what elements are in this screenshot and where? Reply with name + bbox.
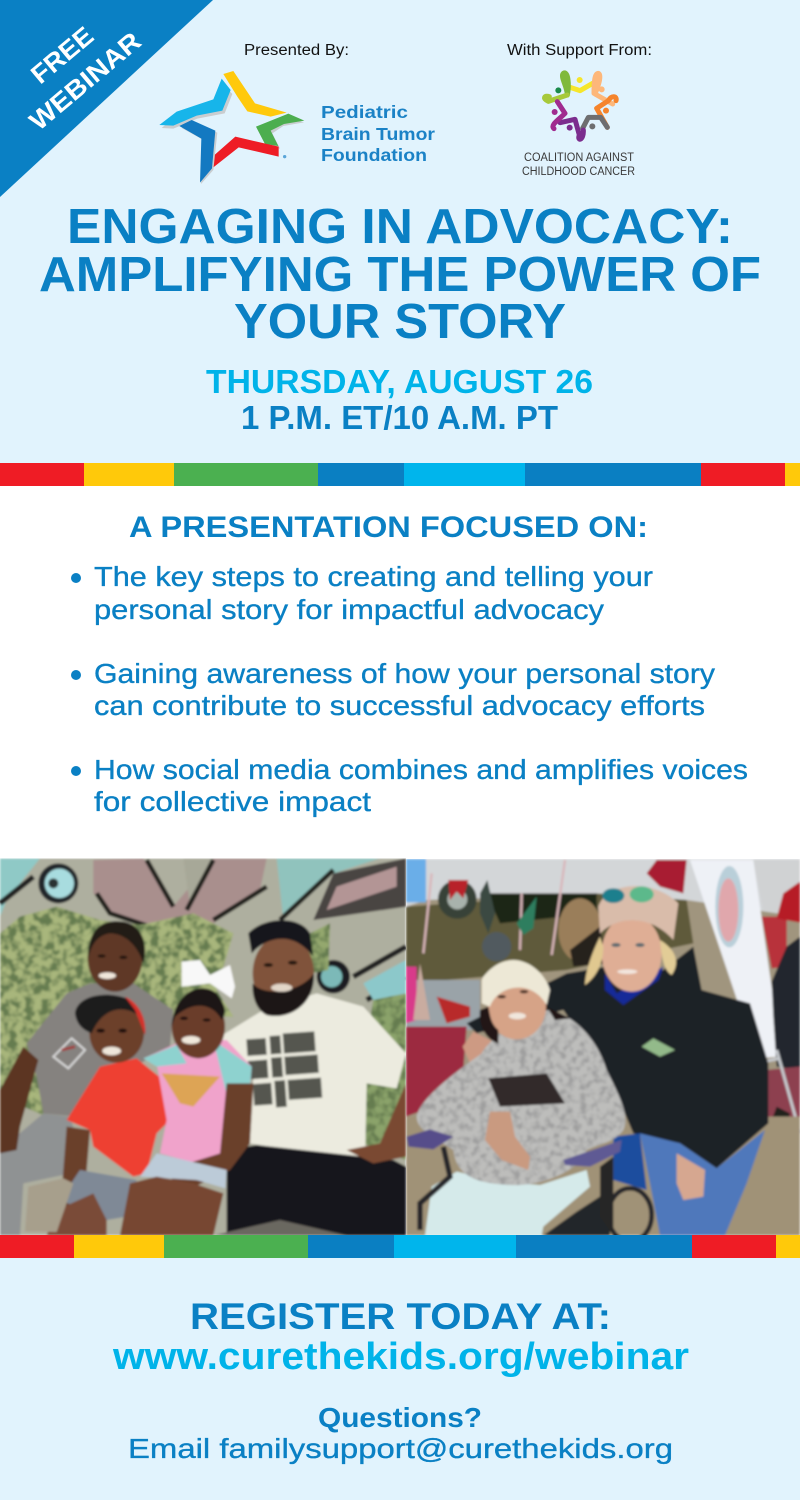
title: AMPLIFYING THE POWER OF [39,248,761,302]
logo text: Coalition Against Childhood Cancer: COALITION AGAINST [524,152,634,164]
bullet 1: personal story for impactful advocacy [94,594,604,625]
title [39,200,761,349]
section heading: A PRESENTATION FOCUSED ON: [129,511,648,544]
logo text: Coalition Against Childhood Cancer: CHILDHOOD CANCER [522,166,635,178]
white content background [0,486,800,858]
color stripe top [0,463,800,486]
presented by label: Presented By: [244,42,349,59]
free webinar corner banner: WEBINAR [23,26,147,136]
wheelchair [407,1129,652,1242]
bullet 1 [71,561,653,625]
girl in fleece [417,932,625,1235]
event date and time: 1 P.M. ET/10 A.M. PT [241,399,558,436]
bullet 3 [71,754,748,817]
register call to action: REGISTER TODAY AT: [190,1296,611,1337]
bullet 2 [71,658,715,721]
contact details: Email familysupport@curethekids.org [128,1433,673,1464]
register call to action: www.curethekids.org/webinar [112,1336,689,1378]
footer background [0,1258,800,1500]
register call to action [112,1296,689,1378]
event date and time [206,363,593,436]
photo: girl in wheelchair with woman at a holiday event [406,859,800,1242]
free webinar corner banner: FREE [25,20,99,90]
bullet 2: can contribute to successful advocacy efforts [94,690,705,721]
bullet 1: The key steps to creating and telling your [94,561,653,592]
color stripe bottom [0,1235,800,1258]
free webinar corner banner [0,0,213,197]
title: ENGAGING IN ADVOCACY: [67,200,733,254]
title: YOUR STORY [234,295,566,349]
contact details: Questions? [318,1402,482,1433]
support label: With Support From: [507,42,652,59]
event date and time: THURSDAY, AUGUST 26 [206,363,593,400]
logo: Pediatric Brain Tumor Foundation star [159,71,304,184]
logo text: Pediatric Brain Tumor Foundation [321,102,435,165]
logo text: Coalition Against Childhood Cancer [522,152,635,178]
foliage [0,907,406,1160]
logo: Coalition Against Childhood Cancer [545,73,616,139]
logo text: Pediatric Brain Tumor Foundation: Brain Tumor [321,124,435,144]
logo text: Pediatric Brain Tumor Foundation: Pediatric [321,102,408,122]
photo: family seated before a graffiti wall [0,858,406,1235]
contact details [128,1402,673,1464]
woman [0,921,173,1235]
bullet list [71,561,748,817]
bullet 2: Gaining awareness of how your personal story [94,658,715,689]
man [220,920,406,1235]
woman in black jacket [463,886,768,1235]
logo text: Pediatric Brain Tumor Foundation: Foundation [321,145,427,165]
girl [120,960,253,1235]
bullet 3: How social media combines and amplifies voices [94,754,748,785]
header background [0,0,800,463]
boy [47,995,170,1235]
bullet 3: for collective impact [94,786,371,817]
